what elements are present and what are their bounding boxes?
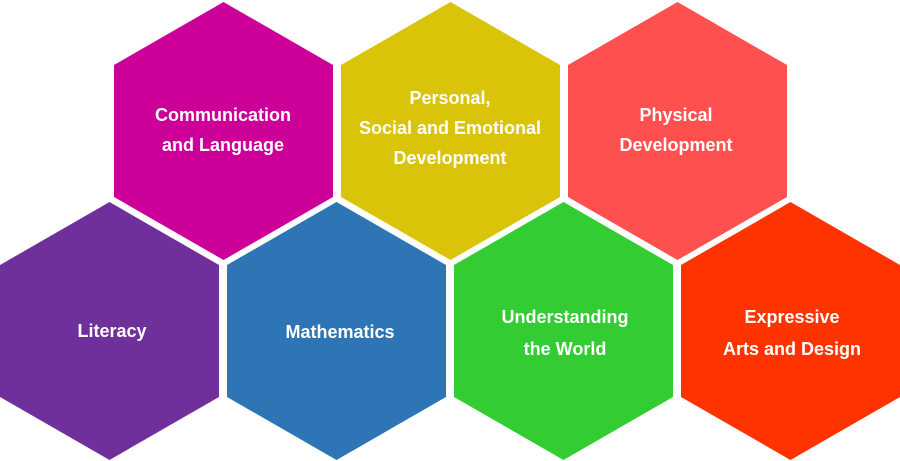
hex: Communication and Language: Communication [155,105,291,125]
hex: Understanding the World: the World [524,339,606,359]
hex: Physical Development: Physical [639,105,713,125]
hex: Physical Development: Development [619,135,733,155]
hex: Literacy [0,202,219,460]
hex: Literacy: Literacy [77,321,147,341]
hex: Physical Development [568,2,787,260]
hex: Communication and Language: and Language [162,135,284,155]
hex: Understanding the World [454,202,673,460]
hex: Communication and Language [114,2,333,260]
hex: Mathematics [227,202,446,460]
hex: Personal, Social and Emotional Development: Development [393,148,507,168]
hex: Expressive Arts and Design [681,202,900,460]
hex: Personal, Social and Emotional Development: Social and Emotional [359,118,541,138]
hex: Expressive Arts and Design: Arts and Design [723,339,861,359]
hex: Expressive Arts and Design: Expressive [744,307,840,327]
hex: Personal, Social and Emotional Development: Personal, [409,88,491,108]
hex: Understanding the World: Understanding [501,307,629,327]
hex: Personal, Social and Emotional Development [341,2,560,260]
hex: Mathematics: Mathematics [285,322,395,342]
